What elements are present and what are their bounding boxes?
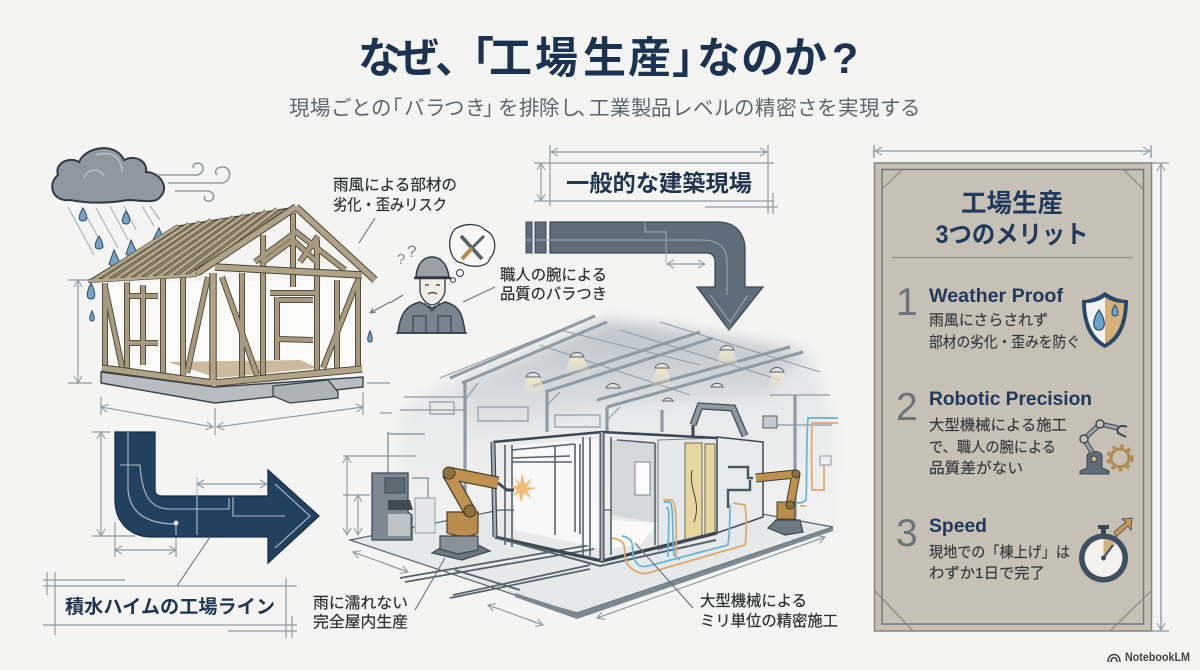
icon: shield	[1082, 292, 1128, 348]
roof rafters	[88, 209, 277, 281]
merit 2: robotic precision	[896, 386, 1132, 477]
steps	[273, 380, 338, 403]
icon: rain cloud and wind	[52, 148, 372, 342]
white panel	[717, 437, 763, 533]
panel title: 3つのメリット	[936, 221, 1088, 249]
merit 2: robotic precision: で、職人の腕による	[929, 439, 1056, 456]
service pipes	[612, 418, 838, 573]
wall studs	[105, 213, 358, 378]
merit 1: weather proof: 雨風にさらされず	[929, 312, 1048, 329]
dimensions: panel	[874, 145, 1169, 631]
ceiling and walls	[400, 322, 835, 540]
label: factory line: 積水ハイムの工場ライン	[65, 596, 275, 618]
icon: worried craftsman: ?	[407, 242, 416, 261]
callout: indoor production: 雨に濡れない	[313, 594, 408, 612]
merit 2: robotic precision: 品質差がない	[929, 459, 1023, 477]
roof plane	[88, 207, 296, 281]
merit 1: weather proof: 部材の劣化・歪みを防ぐ	[929, 334, 1080, 351]
top robot arm	[693, 406, 745, 436]
dimensions: house	[68, 280, 392, 435]
merit 1: weather proof	[896, 281, 1128, 351]
arrow: navy factory arrow	[115, 432, 319, 563]
callout: precision machinery	[635, 543, 838, 630]
dimensions: factory floor	[343, 456, 825, 625]
merit 1: weather proof: Weather Proof	[929, 286, 1064, 307]
arrow: grey site arrow	[526, 222, 763, 330]
illustration: timber house frame	[88, 207, 375, 403]
label: general construction site	[534, 145, 778, 214]
foundation	[101, 372, 363, 403]
dimensions: navy arrow	[92, 432, 267, 557]
callout: rain damage	[333, 176, 457, 243]
icon: stopwatch	[1079, 518, 1132, 582]
callout: rain damage: 劣化・歪みリスク	[333, 196, 447, 214]
merit 3: speed: Speed	[929, 516, 987, 537]
callout: craftsman skill	[390, 266, 607, 303]
roof beams	[400, 316, 832, 525]
plates and gable	[102, 207, 375, 385]
module steel frame	[493, 432, 717, 561]
rails	[400, 545, 594, 598]
merit 2: robotic precision: Robotic Precision	[929, 389, 1092, 410]
icon: robot arm and gear	[1080, 420, 1132, 474]
merit 2: robotic precision: 2	[896, 386, 918, 429]
module room interior	[512, 438, 600, 548]
callout: craftsman skill: 品質のバラつき	[500, 285, 607, 303]
floor slab	[350, 510, 833, 613]
module side wall	[658, 438, 717, 550]
panel: factory merits	[874, 163, 1152, 631]
interior	[102, 278, 362, 382]
ceiling lights	[522, 346, 788, 401]
merit 3: speed: わずか1日で完了	[929, 565, 1045, 582]
right robot	[728, 467, 803, 535]
merit 3: speed	[896, 512, 1132, 582]
panel title	[936, 190, 1088, 249]
leader arrow: to wall	[370, 302, 390, 313]
callout: rain damage: 雨風による部材の	[333, 176, 457, 194]
console machines	[415, 498, 435, 533]
callout: precision machinery: 大型機械による	[700, 592, 807, 610]
icon: worried craftsman: ?	[397, 251, 405, 268]
merit 2: robotic precision: 大型機械による施工	[929, 417, 1067, 434]
merit 3: speed: 現地での「棟上げ」は	[929, 544, 1070, 561]
subtitle: 現場ごとの「バラつき」を排除し、工業製品レベルの精密さを実現する	[289, 97, 920, 120]
panel title: 工場生産	[961, 190, 1063, 218]
callout: craftsman skill: 職人の腕による	[500, 266, 607, 284]
merit 3: speed: 3	[896, 512, 918, 555]
callout: indoor production: 完全屋内生産	[313, 613, 408, 631]
label: general construction site: 一般的な建築現場	[566, 170, 752, 196]
illustration: factory	[350, 316, 838, 619]
icon: worried craftsman	[396, 225, 495, 333]
watermark: NotebookLM: NotebookLM	[1125, 652, 1190, 664]
title: なぜ、「工場生産」なのか?	[358, 35, 858, 83]
merit 1: weather proof: 1	[896, 281, 918, 324]
callout: precision machinery: ミリ単位の精密施工	[700, 612, 838, 630]
callout: indoor production	[313, 558, 445, 631]
label: factory line	[43, 537, 297, 638]
left robot	[432, 467, 537, 560]
